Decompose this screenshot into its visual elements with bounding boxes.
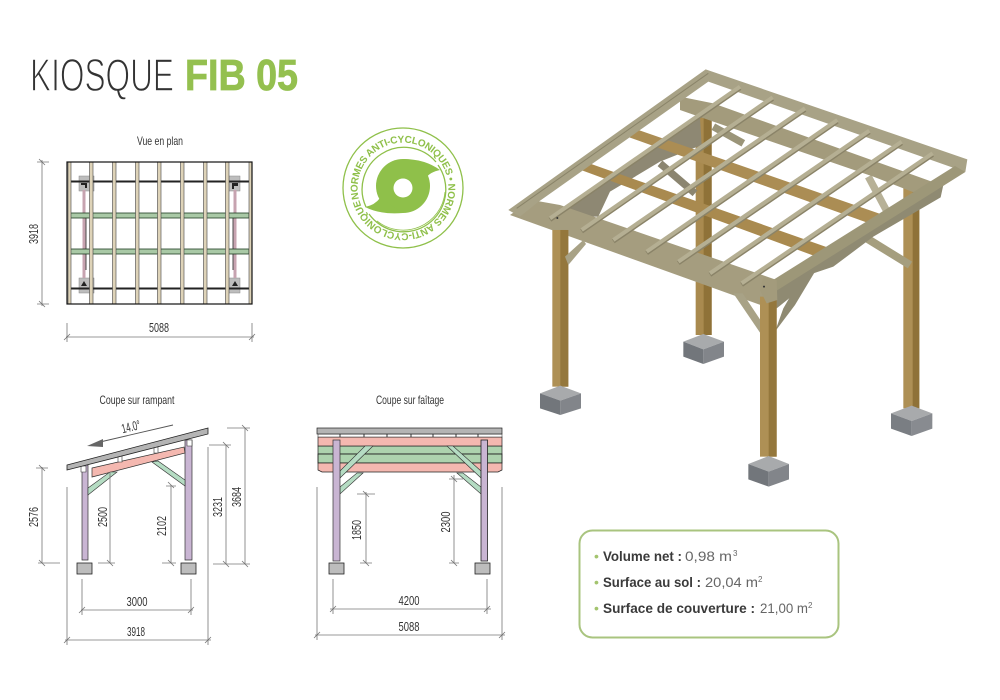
dimension: 3000: 3000 [126, 594, 148, 609]
dimension: 3918: 3918 [26, 224, 41, 244]
text: ground surface: 20,04 m [705, 574, 758, 590]
front post and brace [556, 217, 777, 457]
text: roof surface: Surface de couverture : [603, 600, 755, 616]
panel: key figures [580, 530, 838, 638]
dimension: 3231 [209, 442, 231, 567]
arrow: slope 14 degrees [87, 417, 173, 447]
dimension: 2576 [26, 465, 60, 566]
heading: coupe sur faitage: Coupe sur faîtage [376, 393, 444, 407]
panel: plan view [26, 134, 255, 342]
front-left post [552, 230, 586, 387]
dimension: 2102: 2102 [154, 516, 169, 536]
right gable beam and curved brace [773, 185, 943, 332]
heading: coupe sur rampant: Coupe sur rampant [100, 393, 175, 407]
section drawing [317, 428, 502, 574]
icon: anti-cyclone badge [342, 127, 464, 249]
text: ground surface: 2 [758, 575, 763, 584]
concrete footings front [540, 386, 789, 487]
title: FIB 05 [185, 51, 298, 100]
concrete footings back [683, 334, 932, 436]
text: volume: • [594, 548, 599, 564]
dimension: 2300 [438, 475, 463, 566]
dimension: 1850: 1850 [349, 520, 364, 540]
dimension: 3684 [227, 425, 250, 567]
illustration: 3D timber kiosk [508, 69, 967, 487]
dimension: 2500 [95, 472, 115, 566]
text: volume [594, 548, 738, 564]
middle purlins [581, 129, 883, 262]
roof frame [508, 69, 967, 217]
back purlin [680, 97, 937, 200]
dimension: 3000 [79, 579, 194, 615]
dimension: 1850 [349, 491, 375, 566]
rafters [550, 87, 933, 285]
left gable beam [568, 118, 702, 217]
heading: vue en plan: Vue en plan [137, 134, 183, 148]
plan drawing [67, 162, 252, 304]
dimension: 3684: 3684 [229, 487, 244, 507]
dimension: 4200: 4200 [398, 593, 420, 608]
text: volume: 3 [733, 549, 738, 558]
dimension: 3918: 3918 [127, 624, 145, 639]
braces under the roof at the back [660, 127, 910, 265]
panel: section along the slope [26, 393, 250, 645]
dimension: 5088 [314, 487, 505, 640]
text: ground surface: Surface au sol : [603, 574, 701, 590]
dimension: 5088: 5088 [398, 619, 420, 634]
dimension: 3918 [64, 447, 211, 645]
dimension: 2576: 2576 [26, 507, 41, 527]
arrow: slope 14 degrees: 14.0° [120, 417, 142, 436]
text: roof surface: 2 [808, 601, 813, 610]
title: KIOSQUE [30, 49, 174, 101]
back and right posts [696, 115, 919, 408]
text: ground surface [594, 574, 763, 590]
front purlin [510, 200, 777, 306]
dimension: 2300: 2300 [438, 512, 453, 532]
dimension: 2500: 2500 [95, 507, 110, 527]
dimension: 5088 [64, 320, 255, 342]
dimension: 2102 [154, 482, 176, 566]
text: roof surface: • [594, 600, 599, 616]
section drawing [67, 428, 208, 574]
text: roof surface: 21,00 m [760, 600, 808, 616]
right roof rafter [767, 166, 965, 291]
dimension: 5088: 5088 [149, 320, 169, 335]
panel: section along the ridge [314, 393, 505, 640]
dimension: 3231: 3231 [210, 497, 225, 517]
text: volume: 0,98 m [685, 548, 732, 564]
text: volume: Volume net : [603, 548, 682, 564]
dimension: 4200 [330, 579, 491, 614]
dimension: 3918 [26, 159, 49, 307]
text: ground surface: • [594, 574, 599, 590]
